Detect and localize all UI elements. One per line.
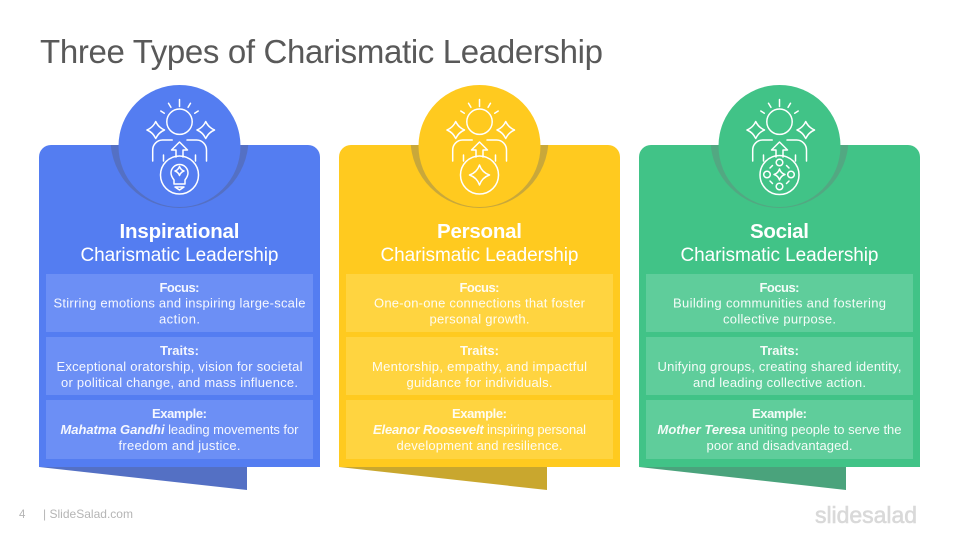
box: example: Mother Teresa uniting people to serve the (658, 422, 902, 437)
box: focus: Stirring emotions and inspiring large-scale (54, 296, 306, 310)
box: traits: Traits: (160, 343, 199, 358)
box: traits: Exceptional oratorship, vision for societal (56, 359, 303, 374)
ribbon tail: yellow (339, 467, 547, 490)
panel: Inspirational (39, 70, 320, 490)
box: traits: and leading collective action. (693, 375, 866, 390)
circle shadow ring: yellow (410, 145, 548, 208)
footer site name: | SlideSalad.com (43, 507, 133, 521)
box: example: Example: (152, 406, 207, 421)
subheading: Charismatic Leadership (80, 245, 278, 266)
circle shadow ring: blue (110, 145, 248, 208)
box: focus (346, 274, 613, 332)
box: focus (646, 274, 913, 332)
box: example (346, 400, 613, 459)
box: traits: Traits: (460, 343, 499, 358)
box: traits: Traits: (760, 343, 799, 358)
box: focus: collective purpose. (723, 312, 836, 326)
box: example (46, 400, 313, 459)
box: example: development and resilience. (396, 438, 562, 453)
icon: leader with light bulb (147, 100, 214, 194)
icon circle: yellow (418, 85, 540, 207)
box: focus: Focus: (460, 280, 500, 295)
panel: Social (639, 70, 920, 490)
card: green (639, 145, 920, 467)
box: traits (46, 337, 313, 395)
box: example: Example: (452, 406, 507, 421)
box: traits: Unifying groups, creating shared identity, (658, 359, 902, 374)
heading: Personal: Personal (437, 220, 522, 243)
box: example (646, 400, 913, 459)
page number: 4 (19, 509, 26, 521)
icon: leader with community (747, 100, 814, 194)
box: focus: Focus: (760, 280, 800, 295)
box: focus (46, 274, 313, 332)
box: example: Example: (752, 406, 807, 421)
box: example: Mahatma Gandhi leading movements for (60, 422, 299, 437)
subheading: Charismatic Leadership (380, 245, 578, 266)
box: traits (346, 337, 613, 395)
panel: Personal (339, 70, 620, 490)
ribbon tail: green (639, 467, 846, 490)
box: focus: personal growth. (430, 312, 530, 326)
box: focus: action. (159, 312, 200, 326)
heading: Inspirational: Inspirational (120, 220, 240, 243)
ribbon tail: blue (39, 467, 247, 490)
box: traits: or political change, and mass influence. (61, 375, 298, 390)
box: traits: Mentorship, empathy, and impactful (372, 359, 587, 374)
icon: leader with star (447, 100, 514, 194)
card: yellow (339, 145, 620, 467)
logo wordmark: slidesalad (815, 502, 917, 528)
box: traits (646, 337, 913, 395)
box: example: poor and disadvantaged. (706, 438, 852, 453)
icon circle: blue (118, 85, 240, 207)
subheading: Charismatic Leadership (680, 245, 878, 266)
icon circle: green (718, 85, 840, 207)
heading: Social: Social (750, 220, 809, 243)
box: focus: One-on-one connections that foster (374, 296, 586, 310)
box: focus: Building communities and fostering (673, 296, 886, 310)
title: Three Types of Charismatic Leadership (40, 33, 603, 70)
box: example: freedom and justice. (118, 438, 240, 453)
box: focus: Focus: (160, 280, 200, 295)
box: traits: guidance for individuals. (406, 375, 552, 390)
box: example: Eleanor Roosevelt inspiring personal (373, 422, 586, 437)
card: blue (39, 145, 320, 467)
circle shadow ring: green (710, 145, 848, 208)
